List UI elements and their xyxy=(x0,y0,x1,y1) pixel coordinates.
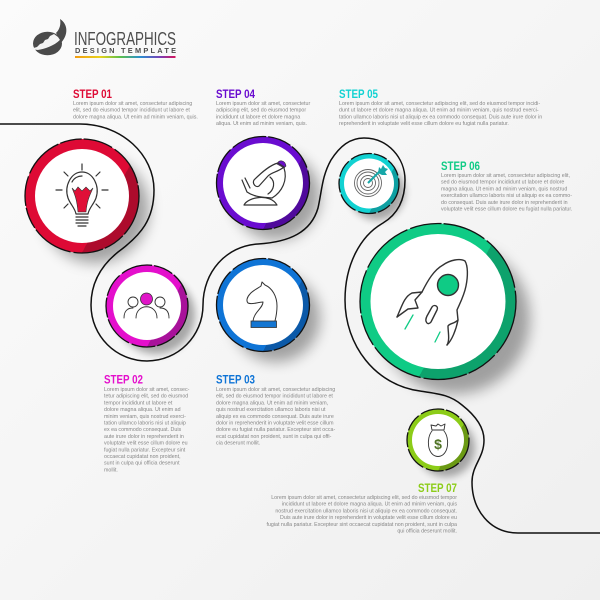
step 06 text: exercitation ullamco laboris nisi ut aliquip ex ea commo- xyxy=(441,193,572,199)
step 03 text: quis nostrud exercitation ullamco laboris nisi ut xyxy=(216,407,326,413)
step 07 text: STEP 07 xyxy=(418,483,457,495)
step 02 text: tempor incididunt ut labore et xyxy=(104,400,173,406)
step 03 text: aliquip ex ea commodo consequat. Duis aute irure xyxy=(216,414,334,420)
icon: microscope xyxy=(242,161,286,205)
step 06 text: magna aliqua. Ut enim ad minim veniam, quis nostrud xyxy=(441,186,567,192)
step 07 circle: money bag xyxy=(407,409,475,477)
step 07 text: qui officia deserunt mollit. xyxy=(397,528,457,534)
step 01 text: Lorem ipsum dolor sit amet, consectetur adipiscing xyxy=(73,101,192,107)
step 02 text: ex ea commodo consequat. Duis xyxy=(104,427,181,433)
icon: rocket xyxy=(397,260,467,345)
connector line xyxy=(0,124,600,533)
step 04 text: incididunt ut labore et dolore magna xyxy=(216,114,300,120)
step 01 text xyxy=(73,89,198,120)
logo: DESIGN TEMPLATE xyxy=(75,46,176,55)
step 02 text: aute irure dolor in reprehenderit in xyxy=(104,434,184,440)
step 05 text: Lorem ipsum dolor sit amet, consectetur adipiscing elit, sed do eiusmod tempor incidi- xyxy=(339,101,540,107)
step 06 text: do consequat. Duis aute irure dolor in reprehenderit in xyxy=(441,200,568,206)
step 03 text: cia deserunt mollit. xyxy=(216,441,260,447)
step 02 text: tetur adipiscing elit, sed do eiusmod xyxy=(104,394,188,400)
step 05 text: tation ullamco laboris nisi ut aliquip ex ea commodo consequat. Duis aute irure dolor in xyxy=(339,114,542,120)
step 02 circle: people xyxy=(106,265,195,354)
step 06 text: sed do eiusmod tempor incididunt ut labore et dolore xyxy=(441,180,564,186)
step 02 text: tation ullamco laboris nisi ut aliquip xyxy=(104,420,186,426)
step 03 text: elit, sed do eiusmod tempor incididunt ut labore et xyxy=(216,394,333,400)
step 02 text: sunt in culpa qui officia deserunt xyxy=(104,461,180,467)
step 03 text xyxy=(216,374,335,447)
step 02 text: mollit. xyxy=(104,467,118,473)
logo: INFOGRAPHICS xyxy=(74,29,176,49)
step 03 text: ecat cupidatat non proident, sunt in culpa qui offi- xyxy=(216,434,332,440)
icon: people xyxy=(124,293,169,318)
step 02 text: occaecat cupidatat non proident, xyxy=(104,454,181,460)
icon: light bulb xyxy=(56,164,108,226)
step 01 text: dolore magna aliqua. Ut enim ad minim veniam, quis. xyxy=(73,114,198,120)
step 02 text: dolore magna aliqua. Ut enim ad xyxy=(104,407,181,413)
step 06 text: STEP 06 xyxy=(441,161,480,173)
step 07 text: Lorem ipsum dolor sit amet, consectetur adipiscing elit, sed do eiusmod tempor xyxy=(271,495,457,501)
step 07 text xyxy=(266,483,457,534)
step 01 text: STEP 01 xyxy=(73,89,113,101)
icon: chess knight xyxy=(247,282,277,328)
step 06 text xyxy=(441,161,572,212)
logo xyxy=(30,19,176,58)
step 02 text: minim veniam, quis nostrud exerci- xyxy=(104,414,186,420)
step 03 circle: chess knight xyxy=(216,258,320,362)
step 06 text: voluptate velit esse cillum dolore eu fugiat nulla pariatur. xyxy=(441,206,572,212)
step 02 text: fugiat nulla pariatur. Excepteur sint xyxy=(104,447,186,453)
icon: money bag: $ xyxy=(434,436,442,452)
step 05 text xyxy=(339,89,542,127)
step 04 text: aliqua. Ut enim ad minim veniam, quis. xyxy=(216,121,307,127)
step 07 text: fugiat nulla pariatur. Excepteur sint occaecat cupidatat non proident, sunt in culpa xyxy=(266,522,457,528)
step 03 text: Lorem ipsum dolor sit amet, consectetur adipiscing xyxy=(216,387,335,393)
step 04 text: adipiscing elit, sed do eiusmod tempor xyxy=(216,108,306,114)
step 04 text: STEP 04 xyxy=(216,89,256,101)
step 03 text: dolor in reprehenderit in voluptate velit esse cillum xyxy=(216,420,334,426)
step 05 text: dunt ut labore et dolore magna aliqua. Ut enim ad minim veniam, quis nostrud exerci- xyxy=(339,108,539,114)
step 03 text: STEP 03 xyxy=(216,374,255,386)
step 06 text: Lorem ipsum dolor sit amet, consectetur adipiscing elit, xyxy=(441,173,570,179)
step 01 text: elit, sed do eiusmod tempor incididunt ut labore et xyxy=(73,108,190,114)
step 05 text: STEP 05 xyxy=(339,89,379,101)
step 07 text: incididunt ut labore et dolore magna aliqua. Ut enim ad minim veniam, quis xyxy=(282,502,457,508)
step 05 text: reprehenderit in voluptate velit esse cillum dolore eu fugiat nulla pariatur. xyxy=(339,121,509,127)
step 07 text: Duis aute irure dolor in reprehenderit in voluptate velit esse cillum dolore eu xyxy=(280,515,457,521)
step 02 text xyxy=(104,374,190,473)
step 04 text xyxy=(216,89,310,127)
step 04 text: Lorem ipsum dolor sit amet, consectetur xyxy=(216,101,310,107)
step 01 circle: light bulb xyxy=(25,139,149,263)
step 03 text: dolore magna aliqua. Ut enim ad minim veniam, xyxy=(216,400,328,406)
step 02 text: voluptate velit esse cillum dolore eu xyxy=(104,441,188,447)
step 07 text: nostrud exercitation ullamco laboris nisi ut aliquip ex ea commodo consequat. xyxy=(275,508,457,514)
step 04 circle: microscope xyxy=(216,136,320,240)
step 02 text: Lorem ipsum dolor sit amet, consec- xyxy=(104,387,190,393)
step 06 circle: rocket xyxy=(360,224,530,394)
step 03 text: dolore eu fugiat nulla pariatur. Excepteur sint occa- xyxy=(216,427,335,433)
step 05 circle: target xyxy=(339,154,405,220)
step 02 text: STEP 02 xyxy=(104,374,143,386)
icon: target xyxy=(354,165,388,196)
